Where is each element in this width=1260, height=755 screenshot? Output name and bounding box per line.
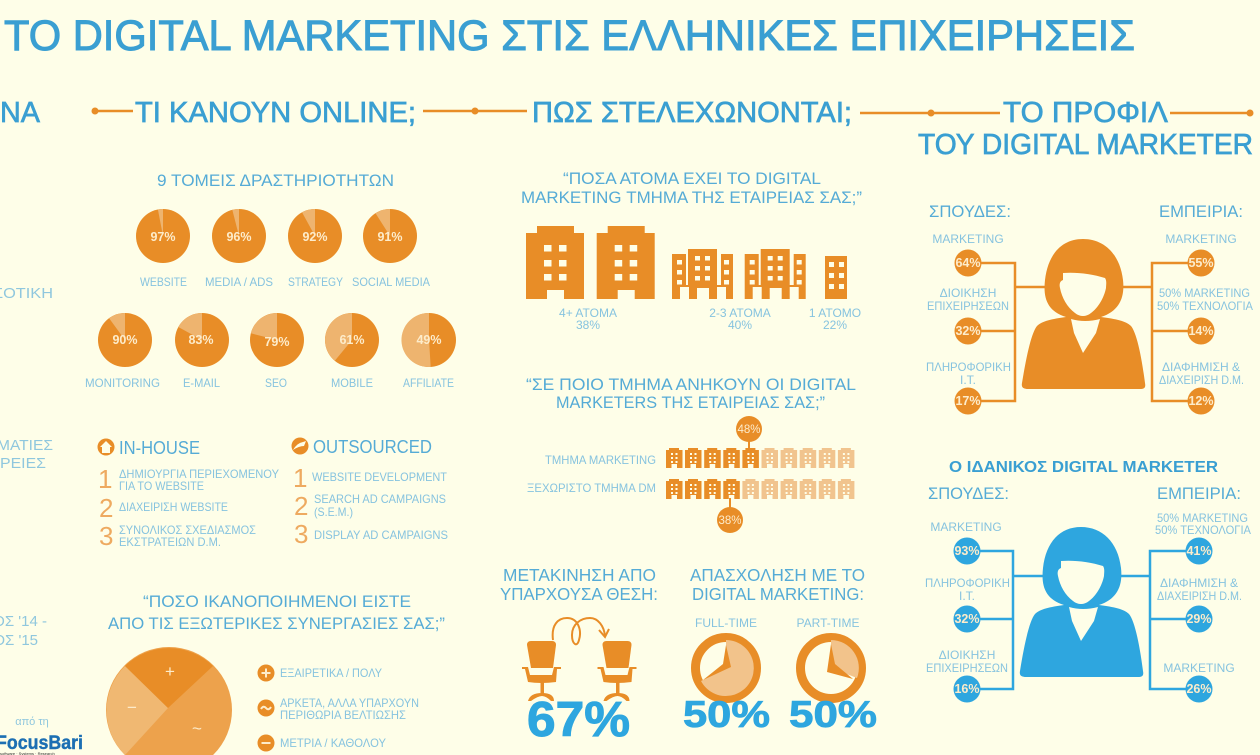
pie: monitoring 90%: 90% xyxy=(112,333,138,347)
stat: 67%: 67% xyxy=(527,693,630,747)
left values: I.T. xyxy=(959,589,975,603)
panel: ideal digital marketer xyxy=(925,459,1251,702)
panel: in-house list: ΔΗΜΙΟΥΡΓΙΑ ΠΕΡΙΕΧΟΜΕΝΟΥ xyxy=(119,467,279,481)
chart: separate DM department row: ΞΕΧΩΡΙΣΤΟ ΤΜΗΜΑ DM xyxy=(527,481,656,495)
pie labels xyxy=(85,275,454,390)
panel: current digital marketer profile xyxy=(926,202,1253,414)
panel: outsourced list: 2 xyxy=(294,491,308,521)
heading: satisfaction question: “ΠΟΣΟ ΙΚΑΝΟΠΟΙΗΜΕΝΟΙ ΕΙΣΤΕ xyxy=(143,592,411,611)
left values: 64% xyxy=(955,256,981,270)
right values: MARKETING xyxy=(1163,661,1235,675)
heading: studies: ΣΠΟΥΔΕΣ: xyxy=(929,202,1011,221)
panel: in-house list: 1 xyxy=(98,464,112,494)
right values: 26% xyxy=(1186,682,1212,696)
pie chart: satisfaction xyxy=(106,647,232,755)
heading: experience: ΕΜΠΕΙΡΙΑ: xyxy=(1157,484,1241,503)
panel: in-house list: ΔΙΑΧΕΙΡΙΣΗ WEBSITE xyxy=(119,500,228,514)
heading: satisfaction question: ΑΠΟ ΤΙΣ ΕΞΩΤΕΡΙΚΕΣ ΣΥΝΕΡΓΑΣΙΕΣ ΣΑΣ;” xyxy=(108,614,445,633)
right values: 50% MARKETING xyxy=(1159,286,1250,300)
icon: outsourced arrow xyxy=(292,438,308,454)
heading: team size question xyxy=(521,170,862,207)
left values: 93% xyxy=(954,544,980,558)
heading: job move xyxy=(500,565,658,604)
chart: marketing department row: 48% xyxy=(737,424,761,436)
stats: 50% and 50% xyxy=(683,694,877,735)
pie labels: MONITORING xyxy=(85,376,160,390)
pie: media ads 96% xyxy=(212,209,266,263)
left values: ΠΛΗΡΟΦΟΡΙΚΗ xyxy=(926,360,1011,374)
right values: 50% ΤΕΧΝΟΛΟΓΙΑ xyxy=(1157,299,1253,313)
icon: person orange xyxy=(1022,239,1145,389)
left values xyxy=(925,520,1010,702)
heading: outsourced: OUTSOURCED xyxy=(313,437,432,457)
pie: strategy 92% xyxy=(288,209,342,263)
section headings: ΤΟ ΠΡΟΦΙΛ xyxy=(1003,97,1169,129)
heading: employment xyxy=(690,565,865,604)
heading: ideal marketer: Ο ΙΔΑΝΙΚΟΣ DIGITAL MARKETER xyxy=(949,459,1218,476)
pie: social media 91%: 91% xyxy=(377,230,403,244)
heading: job move: ΥΠΑΡΧΟΥΣΑ ΘΕΣΗ: xyxy=(500,584,658,604)
cropped left column fragments: ΡΕΙΕΣ xyxy=(0,455,46,472)
icon: medium building 1 xyxy=(672,249,733,299)
icon: house xyxy=(98,438,114,456)
right values: 50% MARKETING xyxy=(1157,511,1248,525)
section headings xyxy=(0,97,1253,161)
icon: medium building 2 xyxy=(745,249,806,299)
right values: 41% xyxy=(1186,544,1212,558)
legend: satisfaction: ΠΕΡΙΘΩΡΙΑ ΒΕΛΤΙΩΣΗΣ xyxy=(280,708,406,722)
right values: ΔΙΑΧΕΙΡΙΣΗ D.M. xyxy=(1157,589,1242,603)
pie: mobile 61% xyxy=(325,313,379,367)
pie chart: satisfaction: − xyxy=(127,698,137,717)
pie: email 83%: 83% xyxy=(188,333,214,347)
right values: MARKETING xyxy=(1165,232,1237,246)
chart: marketing department row: ΤΜΗΜΑ MARKETING xyxy=(545,453,656,467)
left values: MARKETING xyxy=(930,520,1002,534)
legend: satisfaction: ΕΞΑΙΡΕΤΙΚΑ / ΠΟΛΥ xyxy=(280,666,382,680)
panel: outsourced list: 1 xyxy=(293,463,307,493)
right values: 50% ΤΕΧΝΟΛΟΓΙΑ xyxy=(1155,523,1251,537)
panel: in-house list: ΓΙΑ ΤΟ WEBSITE xyxy=(119,479,204,493)
arrow: chair loop xyxy=(553,618,609,644)
pie labels: SEO xyxy=(265,376,287,390)
left values: ΔΙΟΙΚΗΣΗ xyxy=(939,648,995,662)
icon: person blue xyxy=(1020,527,1143,677)
building labels xyxy=(559,306,861,332)
chart: separate DM department row: 38% xyxy=(718,515,742,527)
panel: in-house list: 2 xyxy=(99,493,113,523)
icon: chair move xyxy=(522,618,636,701)
section headings: ΤΙ ΚΑΝΟΥΝ ONLINE; xyxy=(135,97,416,129)
panel: outsourced list: (S.E.M.) xyxy=(314,505,353,519)
stats: 50% and 50%: 50% xyxy=(789,694,877,735)
building labels: 2-3 ΑΤΟΜΑ xyxy=(709,306,771,320)
panel: in-house list xyxy=(98,438,279,551)
heading: experience: ΕΜΠΕΙΡΙΑ: xyxy=(1159,202,1243,221)
clock: part-time: PART-TIME xyxy=(797,616,859,630)
chart: separate DM department row xyxy=(527,479,854,533)
icon: small building xyxy=(825,256,847,299)
title: TO DIGITAL MARKETING ΣΤΙΣ ΕΛΛΗΝΙΚΕΣ ΕΠΙΧΕΙΡΗΣΕΙΣ xyxy=(4,12,1135,60)
panel: outsourced list: DISPLAY AD CAMPAIGNS xyxy=(314,528,448,542)
cropped left column fragments xyxy=(0,285,53,649)
legend: satisfaction xyxy=(258,664,419,752)
left values: ΕΠΙΧΕΙΡΗΣΕΩΝ xyxy=(927,299,1009,313)
panel: in-house list: ΣΥΝΟΛΙΚΟΣ ΣΧΕΔΙΑΣΜΟΣ xyxy=(119,523,256,537)
left values: I.T. xyxy=(960,373,976,387)
left values: ΠΛΗΡΟΦΟΡΙΚΗ xyxy=(925,576,1010,590)
pie labels: MEDIA / ADS xyxy=(205,275,273,289)
panel: in-house list: ΕΚΣΤΡΑΤΕΙΩΝ D.M. xyxy=(119,535,221,549)
heading: employment: DIGITAL MARKETING: xyxy=(692,584,864,604)
panel: outsourced list: 3 xyxy=(294,519,308,549)
legend: satisfaction: ΜΕΤΡΙΑ / ΚΑΘΟΛΟΥ xyxy=(280,736,386,750)
left values: 17% xyxy=(955,394,981,408)
pie labels: AFFILIATE xyxy=(403,376,454,390)
left values: ΕΠΙΧΕΙΡΗΣΕΩΝ xyxy=(926,661,1008,675)
pie: seo 79% xyxy=(250,313,304,367)
right values: ΔΙΑΦΗΜΙΣΗ & xyxy=(1160,576,1238,590)
heading: in-house: IN-HOUSE xyxy=(119,438,200,458)
right values: 12% xyxy=(1188,394,1214,408)
left values: 16% xyxy=(954,682,980,696)
left values: 32% xyxy=(955,324,981,338)
heading: department question: “ΣΕ ΠΟΙΟ ΤΜΗΜΑ ΑΝΗΚΟΥΝ ΟΙ DIGITAL xyxy=(526,376,856,394)
right values: 29% xyxy=(1186,612,1212,626)
timeline connector xyxy=(92,108,1254,116)
panel: outsourced list: SEARCH AD CAMPAIGNS xyxy=(314,492,446,506)
heading: satisfaction question xyxy=(108,592,445,633)
pie: mobile 61%: 61% xyxy=(339,333,365,347)
panel: outsourced list: WEBSITE DEVELOPMENT xyxy=(312,470,448,484)
right values xyxy=(1157,232,1253,414)
right values xyxy=(1155,511,1251,702)
heading: employment: ΑΠΑΣΧΟΛΗΣΗ ΜΕ ΤΟ xyxy=(690,565,865,585)
section headings: ΝΑ xyxy=(0,97,41,129)
heading: team size question: MARKETING ΤΜΗΜΑ ΤΗΣ ΕΤΑΙΡΕΙΑΣ ΣΑΣ;” xyxy=(521,189,862,207)
heading: department question: MARKETERS ΤΗΣ ΕΤΑΙΡΕΙΑΣ ΣΑΣ;” xyxy=(556,394,825,412)
legend: satisfaction: ΑΡΚΕΤΑ, ΑΛΛΑ ΥΠΑΡΧΟΥΝ xyxy=(280,696,419,710)
pie chart: satisfaction: ~ xyxy=(192,719,202,738)
pie: strategy 92%: 92% xyxy=(302,230,328,244)
pie: media ads 96%: 96% xyxy=(226,230,252,244)
pie chart: satisfaction: + xyxy=(165,662,175,681)
connector lines xyxy=(968,263,1201,401)
right values: 14% xyxy=(1188,324,1214,338)
pie: website 97%: 97% xyxy=(150,230,176,244)
pie: affiliate 49% xyxy=(401,313,456,367)
section headings: ΤΟΥ DIGITAL MARKETER xyxy=(918,129,1253,161)
icon: large building 2 xyxy=(597,226,655,299)
right values: ΔΙΑΦΗΜΙΣΗ & xyxy=(1162,360,1240,374)
pie labels: STRATEGY xyxy=(288,275,343,289)
heading: department question xyxy=(526,376,856,412)
pie labels: WEBSITE xyxy=(140,275,187,289)
pie: affiliate 49%: 49% xyxy=(416,333,442,347)
pie: email 83% xyxy=(175,313,229,367)
clock: full-time xyxy=(695,616,757,698)
credit: FocusBari xyxy=(0,716,83,755)
stats: 50% and 50%: 50% xyxy=(683,694,770,735)
connector lines xyxy=(967,551,1199,689)
icon: right chair xyxy=(598,641,636,701)
pie: website 97% xyxy=(136,209,190,263)
panel: in-house list: 3 xyxy=(99,521,113,551)
heading: studies: ΣΠΟΥΔΕΣ: xyxy=(928,484,1009,503)
building labels: 22% xyxy=(823,318,847,332)
clock: full-time: FULL-TIME xyxy=(695,616,757,630)
pie: seo 79%: 79% xyxy=(264,335,290,349)
building labels: 40% xyxy=(728,318,752,332)
pie labels: SOCIAL MEDIA xyxy=(352,275,430,289)
right values: ΔΙΑΧΕΙΡΙΣΗ D.M. xyxy=(1159,373,1244,387)
panel: outsourced list xyxy=(292,437,448,549)
right values: 55% xyxy=(1188,256,1214,270)
left values: ΔΙΟΙΚΗΣΗ xyxy=(940,286,996,300)
pie labels: MOBILE xyxy=(331,376,373,390)
building labels: 1 ΑΤΟΜΟ xyxy=(809,306,861,320)
pie labels: E-MAIL xyxy=(183,376,220,390)
building labels: 4+ ΑΤΟΜΑ xyxy=(559,306,617,320)
heading: team size question: “ΠΟΣΑ ΑΤΟΜΑ ΕΧΕΙ ΤΟ DIGITAL xyxy=(563,170,821,188)
left values: MARKETING xyxy=(932,232,1004,246)
pie charts: 9 sectors xyxy=(98,209,456,367)
icon: large building 1 xyxy=(526,226,584,299)
left values: 32% xyxy=(954,612,980,626)
pie: monitoring 90% xyxy=(98,313,152,367)
heading: job move: ΜΕΤΑΚΙΝΗΣΗ ΑΠΟ xyxy=(503,565,656,585)
section headings: ΠΩΣ ΣΤΕΛΕΧΩΝΟΝΤΑΙ; xyxy=(532,97,852,129)
chart: marketing department row xyxy=(545,416,854,468)
left values xyxy=(926,232,1011,414)
credit: FocusBari: από τη xyxy=(15,716,49,728)
pie: social media 91% xyxy=(363,209,417,263)
heading: 9 sectors: 9 ΤΟΜΕΙΣ ΔΡΑΣΤΗΡΙΟΤΗΤΩΝ xyxy=(157,171,394,190)
chart: buildings by team size xyxy=(526,226,847,299)
clock: part-time xyxy=(797,616,862,698)
icon: left chair xyxy=(522,641,561,701)
building labels: 38% xyxy=(576,318,600,332)
